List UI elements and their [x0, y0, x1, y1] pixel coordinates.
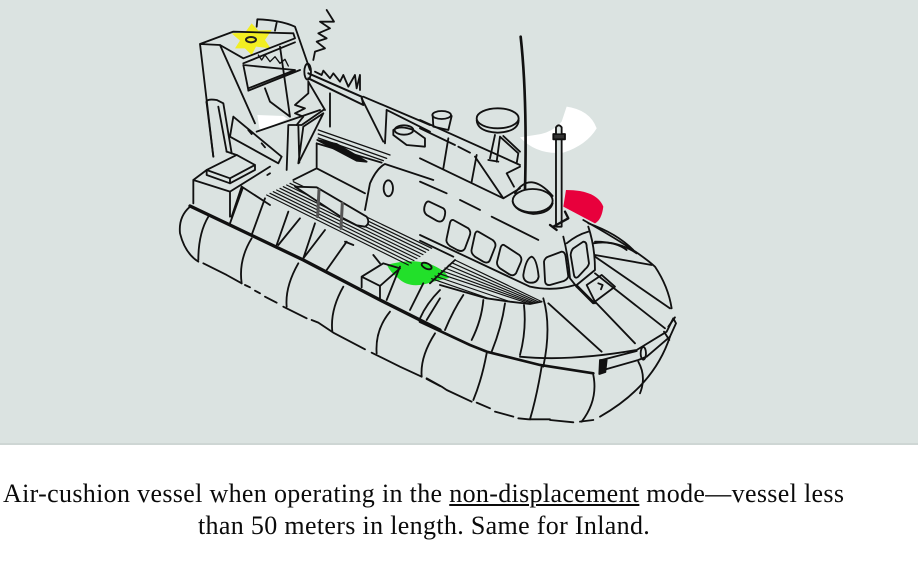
antennas, radar and masthead light	[420, 37, 633, 250]
green sidelight sector	[387, 261, 449, 285]
hovercraft line drawing: mast and stern	[193, 10, 430, 217]
caption line 1: Air-cushion vessel when operating in the non-displacement mode—vessel less	[3, 479, 844, 508]
bow, windows and forward hull	[420, 220, 676, 422]
red sidelight sector	[563, 190, 603, 223]
caption line 2: than 50 meters in length. Same for Inland.	[198, 511, 650, 540]
port side deck, skirt and rub rail	[180, 182, 440, 386]
yellow flashing light	[232, 23, 272, 55]
central cabin and upper deck	[293, 125, 433, 210]
white light sector behind mast	[257, 115, 287, 132]
illustration panel: air-cushion vessel	[0, 0, 918, 445]
white stern light sector	[520, 107, 597, 153]
